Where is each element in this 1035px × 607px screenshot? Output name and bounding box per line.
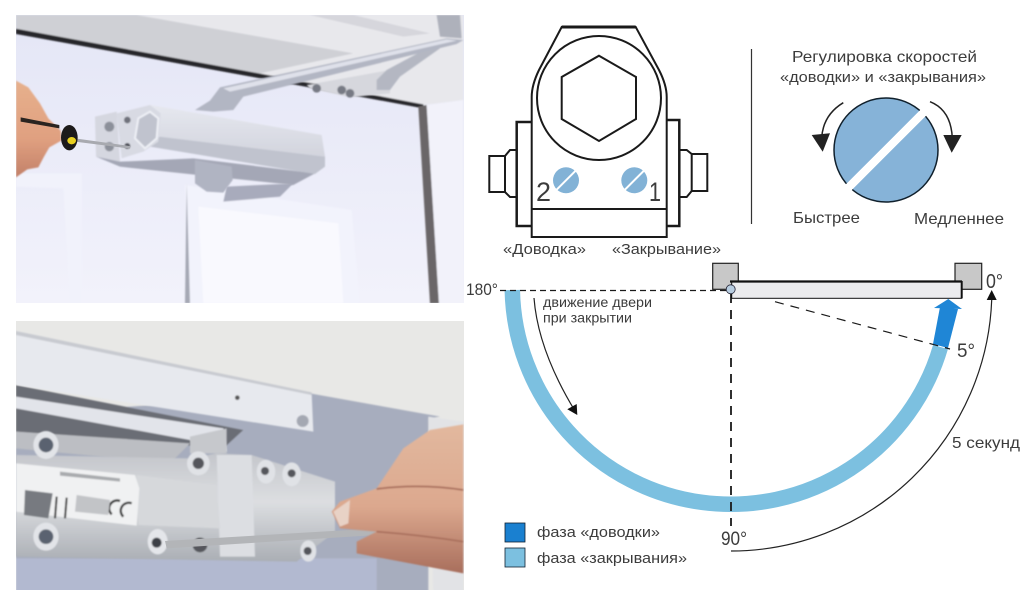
legend: closing phase: фаза «закрывания» — [537, 550, 687, 567]
door closer body — [95, 105, 325, 193]
heading: speed adjustment: «доводки» и «закрывания» — [780, 69, 986, 86]
label: доводка: «Доводка» — [503, 241, 586, 258]
label: закрывание: «Закрывание» — [612, 241, 721, 258]
label: door movement: при закрытии — [543, 310, 632, 326]
side blocks — [489, 120, 707, 226]
photo: screwdriver adjusting door closer — [16, 15, 464, 303]
photo: closer under rail with hex key — [16, 321, 464, 592]
hexagon — [562, 56, 636, 141]
label: 90 degrees: 90° — [721, 529, 747, 550]
legend: latching phase: фаза «доводки» — [537, 524, 660, 541]
wall block left — [713, 263, 738, 289]
door leaf — [730, 281, 962, 298]
label: 5 seconds: 5 секунд — [952, 435, 1021, 452]
label: faster: Быстрее — [793, 210, 860, 227]
housing — [532, 27, 667, 237]
hex key — [165, 528, 377, 548]
arrow: slower — [930, 102, 962, 153]
label: 5 degrees: 5° — [957, 341, 975, 362]
heading: speed adjustment — [780, 49, 986, 86]
hinge — [726, 285, 735, 294]
legend: latching phase — [505, 523, 660, 542]
wall block right — [955, 263, 982, 289]
adjustment circle — [537, 36, 661, 160]
hand — [332, 424, 463, 573]
label: door movement: движение двери — [543, 294, 652, 310]
number 1: 1 — [649, 177, 661, 207]
door closer arm — [195, 15, 463, 112]
closing arc band: closing phase — [512, 290, 940, 504]
arrow: faster — [812, 103, 843, 152]
arrow: 5 seconds arc — [731, 290, 997, 551]
label: door movement — [543, 294, 652, 326]
arrow: door movement — [534, 298, 577, 415]
closing arc band: latching phase — [933, 299, 962, 348]
hand with screwdriver — [16, 81, 130, 177]
screw 1 — [621, 167, 647, 193]
closer body — [16, 428, 335, 562]
label: 180 degrees: 180° — [466, 280, 498, 299]
label: 0 degrees: 0° — [986, 271, 1003, 293]
legend: closing phase — [505, 548, 687, 567]
guide lines — [500, 290, 950, 526]
screw 2 — [553, 167, 579, 193]
overhead rail — [16, 331, 313, 432]
number 2: 2 — [536, 177, 551, 207]
large screw icon — [834, 98, 938, 202]
divider — [750, 49, 752, 224]
diagram: door closer front view — [489, 27, 707, 237]
label: slower: Медленнее — [914, 211, 1004, 228]
heading: speed adjustment: Регулировка скоростей — [792, 49, 977, 66]
